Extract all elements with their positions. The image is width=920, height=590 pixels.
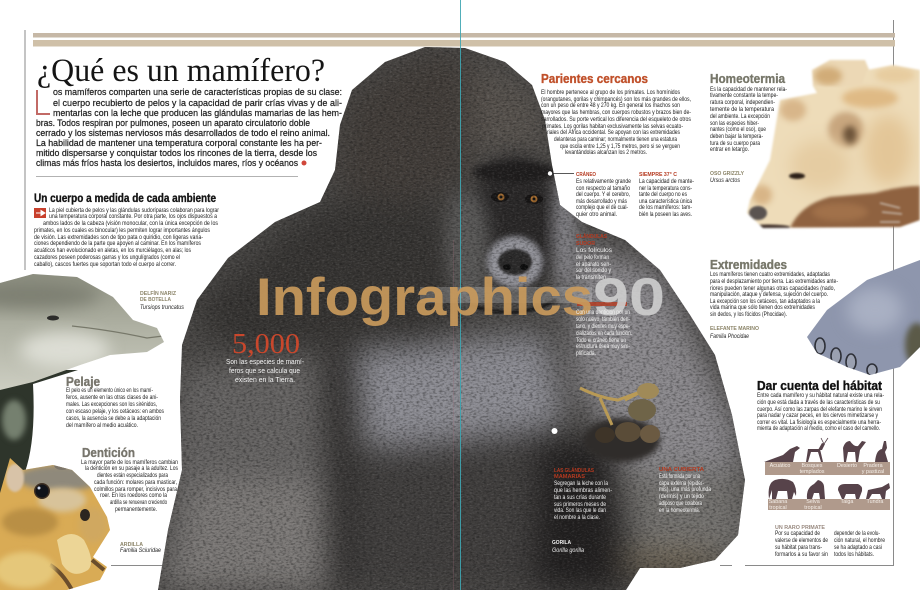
labels row 2: Taiga (841, 499, 853, 505)
callout: glándulas mamarias: LAS GLÁNDULAS (554, 467, 594, 474)
callout: cráneo: CRÁNEO (576, 171, 596, 178)
text: parientes cercanos (541, 89, 692, 156)
text: un cuerpo a medida: caballo), cascos fuertes que soportan todo el cuerpo al correr. (34, 261, 176, 268)
text: un cuerpo a medida: de visión. Las extremidades son de tipo pata o quiridio, con ligeras varia- (34, 234, 203, 241)
intro drop cap (37, 90, 50, 114)
text: un cuerpo a medida: acuáticos han evolucionado en aletas, en los murciélagos, en alas; los (34, 247, 192, 254)
callout: cráneo: complejo que el de cual- (576, 204, 628, 211)
labels row 1: Desierto (837, 463, 857, 469)
heading: un cuerpo a medida: Un cuerpo a medida de cada ambiente (34, 193, 216, 205)
callout: una cubierta (659, 467, 711, 514)
centre fold lines (454, 0, 460, 590)
gorilla body shading (160, 50, 750, 590)
callout: dientes: tario, y dientes muy espe- (576, 323, 630, 330)
text: pelaje: del mamífero al medio acuático. (66, 422, 138, 429)
box: un raro primate: todos los hábitats. (834, 551, 874, 558)
text: homeotermia (710, 86, 787, 153)
callout: dientes (576, 309, 632, 357)
callout: una cubierta: (dermis) y un tejido (659, 493, 704, 500)
heading: pelaje: Pelaje (66, 375, 100, 389)
callout: siempre 37 C (639, 172, 694, 218)
text: pelaje: males. Las excepciones son los sirénidos, (66, 401, 157, 408)
labels row 2: tropical (804, 505, 822, 511)
caption: gorilla: GORILA (552, 540, 571, 546)
callout: una cubierta: adiposo que colabora (659, 500, 702, 507)
text: homeotermia: Es la capacidad de mantener rela- (710, 86, 787, 93)
text: extremidades: La excepción son los cetáceos, tan adaptados a la (710, 298, 820, 305)
text: dar cuenta del hábitat: ción que está dada a través de las características de su (757, 399, 880, 406)
caption: squirrel (120, 542, 162, 554)
text: un cuerpo a medida: ciones dependiendo de la parte que apoyen al caminar. En los mamíferos (34, 240, 202, 247)
callout: glándulas de sudor: GLÁNDULAS (576, 233, 607, 240)
callout: glándulas mamarias: tan a sus crías durante (554, 494, 606, 501)
box: un raro primate: UN RARO PRIMATE (775, 525, 825, 531)
text: homeotermia: temente de la temperatura (710, 106, 774, 113)
intro text: el cuerpo recubierto de pelos y la capacidad de parir crías vivas y de ali- (53, 98, 342, 108)
caption: bear: OSO GRIZZLY (710, 171, 744, 177)
caption: gorilla (552, 540, 585, 554)
text: homeotermia: nantes (como el oso), que (710, 126, 766, 133)
heading: dentición: Dentición (82, 446, 135, 460)
text: pelaje (66, 387, 165, 429)
labels row 1: Bosques (802, 463, 823, 469)
labels row 1: y pastizal (862, 469, 884, 475)
gorilla face (446, 155, 577, 312)
callout: glándulas mamarias: el nombre a la clase. (554, 514, 600, 521)
callout: siempre 37 C: bién la poseen las aves. (639, 211, 692, 218)
gorilla photograph (150, 40, 760, 590)
marker dot on chest (552, 428, 558, 434)
text: parientes cercanos: con un peso de entre 48 y 270 kg. En general los machos son (541, 102, 680, 109)
box: un raro primate: su hábitat para trans- (775, 544, 822, 551)
intro text: La habilidad de mantener una temperatura corporal constante les ha per- (36, 138, 322, 148)
box: un raro primate: se ha adaptado a casi (834, 544, 882, 551)
callout: glándulas de sudor: del pelo forman (576, 254, 609, 261)
callout: siempre 37 C: SIEMPRE 37° C (639, 172, 678, 178)
intro text (36, 87, 342, 168)
silhouettes row 2 (769, 479, 890, 499)
top decorative bars (33, 33, 895, 46)
stat: 5,000 species (226, 329, 304, 384)
text: dentición: La mayor parte de los mamíferos cambian (81, 459, 178, 466)
text: dar cuenta del hábitat (757, 392, 884, 432)
callout: glándulas de sudor: el aparato sen- (576, 261, 611, 268)
callout: glándulas mamarias: vida. Son las que le dan (554, 507, 606, 514)
labels row 2: Sabana (769, 499, 787, 505)
text: extremidades: vida marina que sólo tienen dos extremidades (710, 304, 816, 311)
callout: glándulas de sudor: la transmiten (576, 274, 606, 281)
callout: siempre 37 C: tante del cuerpo no es (639, 191, 688, 198)
heading: homeotermia: Homeotermia (710, 72, 786, 86)
box: un raro primate: ción natural, el hombre (834, 537, 885, 544)
text: dentición: la dentición en su pasaje a la adultez. Los (85, 465, 179, 472)
text: extremidades: Los mamíferos tienen cuatro extremidades, adaptadas (710, 271, 831, 278)
photo: dolphin (0, 270, 170, 495)
text: extremidades: sin dedos, y los fócidos (Phocidae). (710, 311, 787, 318)
text: homeotermia: del ambiente. La excepción (710, 113, 770, 120)
callout: una cubierta: capa externa (epider- (659, 480, 704, 487)
text: extremidades: riores pueden tener algunas otras capacidades (nado, (710, 285, 835, 292)
caption: squirrel: ARDILLA (120, 542, 143, 548)
gorilla hand with fruit (580, 383, 660, 462)
callout: una cubierta: en la homeotermia. (659, 507, 700, 514)
icon: red arrow marker (34, 208, 46, 218)
callout: glándulas mamarias (554, 467, 612, 521)
labels row 1: Pradera (863, 463, 883, 469)
watermark: Infographics90: 90 (593, 268, 665, 327)
callout: cráneo: del cuerpo. Y el cerebro, (576, 191, 630, 198)
text: dentición: dientes están especializados para (97, 472, 168, 479)
text: homeotermia: son las especies hiber- (710, 120, 759, 127)
title: ¿Qué es un mamífero? (37, 53, 325, 89)
labels row 2: tropical (769, 505, 787, 511)
text: un cuerpo a medida: una temperatura corporal constante. Por otra parte, los ojos dispuestos a (49, 213, 217, 220)
text: un cuerpo a medida: La piel cubierta de pelos y las glándulas sudoríparas colaboran para lograr (49, 207, 220, 214)
stat: 5,000 species: existen en la Tierra. (235, 375, 295, 384)
text: un cuerpo a medida (34, 207, 220, 268)
callout: una cubierta: mis), una más profunda (659, 486, 711, 493)
silhouettes row 1 (764, 438, 888, 462)
box: un raro primate: formarlos a su favor sin (775, 551, 828, 558)
fur texture (150, 40, 760, 590)
text: homeotermia: ratura corporal, independien- (710, 99, 775, 106)
text: pelaje: con escaso pelaje, y los cetáceos: en ambos (66, 408, 165, 415)
text: un cuerpo a medida: primates, en los cuales es binocular) les permiten lograr importantes ángulos (34, 227, 211, 234)
callout: glándulas mamarias: que las hembras alimen- (554, 487, 612, 494)
text: parientes cercanos: El hombre pertenece al grupo de los primates. Los homínidos (541, 89, 681, 96)
text: parientes cercanos: riales del África occidental. Se apoyan con las extremidades (547, 127, 681, 136)
caption: dolphin: DE BOTELLA (140, 297, 171, 303)
callout: una cubierta: UNA CUBIERTA (659, 467, 705, 473)
text: dentición: ardilla se renuevan creciendo (110, 499, 167, 506)
labels row 1: templados (800, 469, 825, 475)
stat: 5,000 species: feros que se calcula que (229, 366, 300, 375)
callout: dientes: cializados en cada función. (576, 330, 632, 337)
text: pelaje: El pelo es un elemento único en los mamí- (66, 387, 153, 394)
box: un raro primate (775, 525, 885, 558)
caption: bear (710, 171, 744, 184)
text: dentición: permanentemente. (115, 506, 157, 513)
labels row 2: Tundra (867, 499, 883, 505)
callout: glándulas mamarias: MAMARIAS (554, 474, 585, 480)
text: parientes cercanos: (orangutanes, gorilas y chimpancés) son los más grandes de ellos, (541, 96, 691, 103)
heading: dar cuenta del hábitat: Dar cuenta del hábitat (757, 379, 883, 393)
photo: squirrel (0, 455, 115, 590)
intro text: bras. Todos respiran por pulmones, poseen un aparato circulatorio doble (36, 118, 310, 128)
labels row 1 (770, 463, 884, 475)
text: extremidades (710, 271, 838, 318)
text: dar cuenta del hábitat: Entre cada mamífero y su hábitat natural existe una rela- (757, 392, 884, 399)
callout: glándulas de sudor: SUDOR (576, 241, 596, 247)
caption: dolphin: Tursiops truncatus (140, 305, 184, 311)
callout: dientes: solo nuevo, también den- (576, 316, 630, 323)
callout: cráneo: quier otro animal. (576, 211, 617, 218)
intro text: climas más fríos hasta los desiertos, incluidos mares, ríos y océanos (36, 158, 298, 168)
text: parientes cercanos: sarrollados. Su porte vertical los diferencia del esqueleto de otros (541, 116, 692, 123)
labels row 2 (769, 499, 883, 511)
callout: glándulas mamarias: Segregan la leche con la (554, 480, 608, 487)
text: parientes cercanos: delanteras para caminar; normalmente tienen una estatura (554, 136, 677, 143)
labels row 2: Selva (806, 499, 820, 505)
text: dentición (81, 459, 179, 513)
caption: squirrel: Familia Sciuridae (120, 548, 162, 554)
stat: 5,000 species: 5,000 (232, 329, 300, 360)
text: dentición: colmillos para romper, incisivos para (94, 486, 177, 493)
stat: 5,000 species: Son las especies de mamí- (226, 357, 304, 366)
labels row 1: Acuático (770, 463, 790, 469)
watermark: Infographics90: Infographics (256, 268, 593, 327)
text: homeotermia: entrar en letargo. (710, 146, 749, 153)
habitat chart: animals and ground bars (764, 438, 890, 511)
callout: dientes: Todo el cráneo tiene un (576, 337, 626, 344)
text: homeotermia: deben bajar la tempera- (710, 133, 763, 140)
text: parientes cercanos: levantándolas alcanzan los 2 metros. (565, 149, 647, 156)
callout: cráneo: Es relativamente grande (576, 178, 631, 185)
callout: cráneo: más desarrollado y más (576, 198, 628, 205)
caption: gorilla: Gorilla gorilla (552, 548, 585, 554)
intro text: os mamíferos comparten una serie de características propias de su clase: (53, 87, 342, 97)
heading: parientes cercanos: Parientes cercanos (541, 72, 648, 86)
text: extremidades: para el desplazamiento por tierra. Las extremidades ante- (710, 278, 838, 285)
heading: extremidades: Extremidades (710, 258, 787, 272)
text: pelaje: casos, la ausencia se debe a la adaptación (66, 415, 161, 422)
caption: elephant seal (710, 326, 759, 340)
callout: glándulas de sudor (576, 233, 613, 281)
callout: cráneo: con respecto al tamaño (576, 185, 630, 192)
callout: glándulas de sudor: sor del sonido y (576, 267, 612, 274)
box: un raro primate: Por su capacidad de (775, 530, 820, 537)
photo: bear (740, 55, 920, 235)
text: pelaje: feros, ausente en las otras clases de ani- (66, 394, 158, 401)
text: dar cuenta del hábitat: correr es vital. La fisiología es especialmente una herra- (757, 419, 881, 426)
caption: elephant seal: ELEFANTE MARINO (710, 326, 759, 332)
text: homeotermia: tivamente constante la tempe- (710, 92, 778, 99)
intro text: mentarlas con la leche que producen las glándulas mamarias de las hem- (53, 108, 342, 118)
callout: una cubierta: Está formada por una (659, 473, 700, 480)
box: un raro primate: depender de la evolu- (834, 530, 880, 537)
callout: siempre 37 C: ner la temperatura cons- (639, 185, 692, 192)
text: parientes cercanos: primates. Los gorilas habitan exclusivamente las selvas ecuato- (542, 123, 683, 130)
callout: siempre 37 C: La capacidad de mante- (639, 178, 694, 185)
callout: glándulas de sudor: Los folículos (576, 247, 613, 254)
callout: cráneo (576, 171, 631, 218)
callout: dientes: plificada. (576, 350, 596, 357)
text: un cuerpo a medida: cazadores poseen poderosas garras y los ungulígrados (como el (34, 254, 180, 261)
callout: glándulas mamarias: sus primeros meses de (554, 501, 606, 508)
text: dentición: cada función: molares para masticar, (94, 479, 177, 486)
intro text: mitido dispersarse y conquistar todos los rincones de la tierra, desde los (36, 148, 317, 158)
callout: dientes: Con una dentición por un (576, 309, 630, 316)
text: dar cuenta del hábitat: para nadar y cazar peces, en los ciervos mimetizarse y (757, 412, 879, 419)
caption: bear: Ursus arctos (710, 178, 740, 184)
callout: siempre 37 C: una característica única (639, 198, 692, 205)
photo: elephant seal flipper (807, 260, 920, 375)
text: parientes cercanos: mayores que las hembras, con cuerpos robustos y brazos bien de- (541, 109, 691, 116)
intro text: cerrado y los sistemas nerviosos más desarrollados de todo el reino animal. (36, 128, 330, 138)
callout: siempre 37 C: de los mamíferos: tam- (639, 204, 692, 211)
text: parientes cercanos: que oscila entre 1,25 y 1,75 metros, pero si se yerguen (560, 143, 680, 150)
callout: cráneo leader (548, 171, 574, 176)
callout: dientes: estructura ósea muy sim- (576, 343, 630, 350)
text: homeotermia: tura de su cuerpo para (710, 140, 760, 147)
ground bars (765, 462, 890, 510)
text: un cuerpo a medida: ambos lados de la cabeza (visión monocular, con la única excepción de los (43, 220, 219, 227)
text: extremidades: manipulación, ataque y defensa, sujeción del cuerpo. (710, 291, 828, 298)
caption: elephant seal: Familia Phocidae (710, 334, 750, 340)
caption: dolphin (140, 289, 184, 311)
text: dar cuenta del hábitat: cuerpo. Así como las zarpas del elefante marino le sirven (757, 406, 882, 413)
caption: dolphin: DELFÍN NARIZ (140, 289, 177, 297)
text: dentición: roer. En los roedores como la (100, 492, 167, 499)
box: un raro primate: valerse de elementos de (775, 537, 828, 544)
